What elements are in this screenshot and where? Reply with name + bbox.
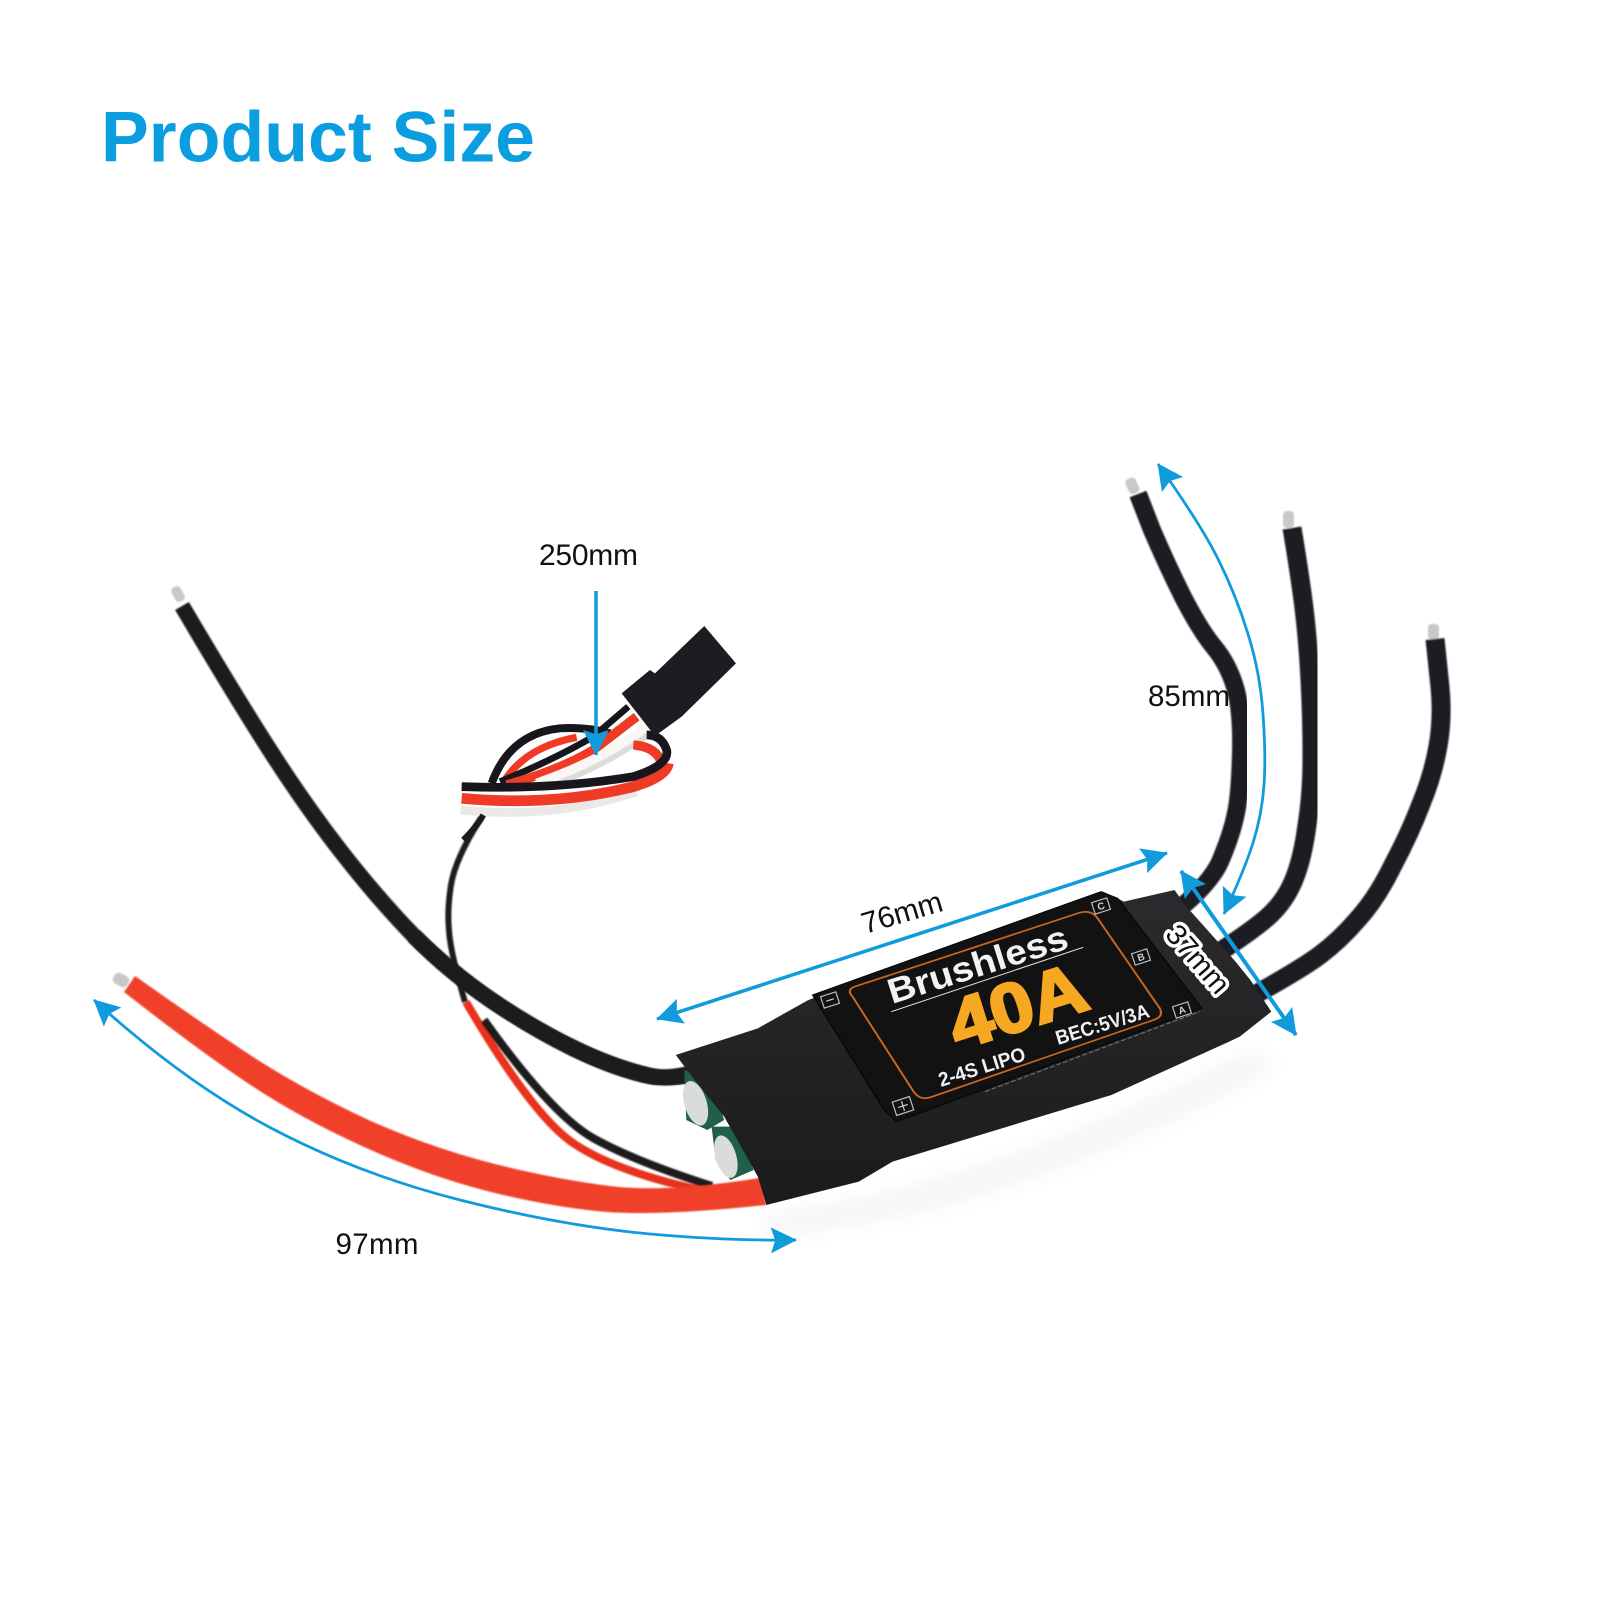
label: 85mm: 85mm xyxy=(1148,680,1230,713)
underline xyxy=(891,947,1083,1012)
arrow: 250mm lead xyxy=(594,591,598,755)
arrow: 97mm power lead xyxy=(94,1000,796,1240)
wire: motor lead A xyxy=(1124,476,1241,912)
arrow: 85mm motor lead xyxy=(1158,464,1265,914)
solder pad marker: B: B xyxy=(1136,952,1146,964)
label text: cell count: 2-4S LIPO xyxy=(936,1044,1028,1092)
wire: motor lead B xyxy=(1210,511,1312,958)
label: 76mm: 76mm xyxy=(858,885,947,941)
solder pad marker: C xyxy=(1092,898,1111,915)
solder pad marker: A: A xyxy=(1177,1005,1187,1017)
label: 37mm: 37mm xyxy=(1159,919,1236,1001)
arrow: 76mm body length xyxy=(657,853,1167,1019)
label: 97mm: 97mm xyxy=(336,1228,418,1261)
label plate xyxy=(813,892,1202,1122)
wire: motor lead C xyxy=(1240,624,1441,1003)
solder pad marker: plus xyxy=(892,1097,914,1115)
plate lower edge sheen xyxy=(985,1012,1200,1092)
title: Product Size xyxy=(101,98,535,178)
connector housing xyxy=(622,626,736,736)
orange border xyxy=(850,912,1161,1098)
redraw left lead over signal cable xyxy=(414,936,690,1078)
solder pad marker: minus xyxy=(821,992,839,1008)
soft shadow under controller xyxy=(760,1050,1280,1235)
arrow: 37mm body width xyxy=(1181,871,1296,1035)
wire: red power lead xyxy=(111,971,766,1213)
solder pad marker: B xyxy=(1132,949,1151,966)
label text: Brushless: Brushless xyxy=(883,918,1073,1012)
controller body with shrink wrap xyxy=(676,890,1271,1205)
wire: left black power lead xyxy=(170,585,690,1078)
servo lead loop and connector xyxy=(461,626,736,840)
label: 250mm: 250mm xyxy=(539,539,638,572)
label text: BEC: BEC:5V/3A xyxy=(1053,1000,1152,1050)
solder pad marker: C: C xyxy=(1096,901,1106,913)
label text: 40A: 40A xyxy=(939,948,1096,1064)
capacitors xyxy=(678,1070,754,1180)
solder pad marker: A xyxy=(1173,1002,1192,1019)
signal cable lower run xyxy=(448,818,712,1190)
